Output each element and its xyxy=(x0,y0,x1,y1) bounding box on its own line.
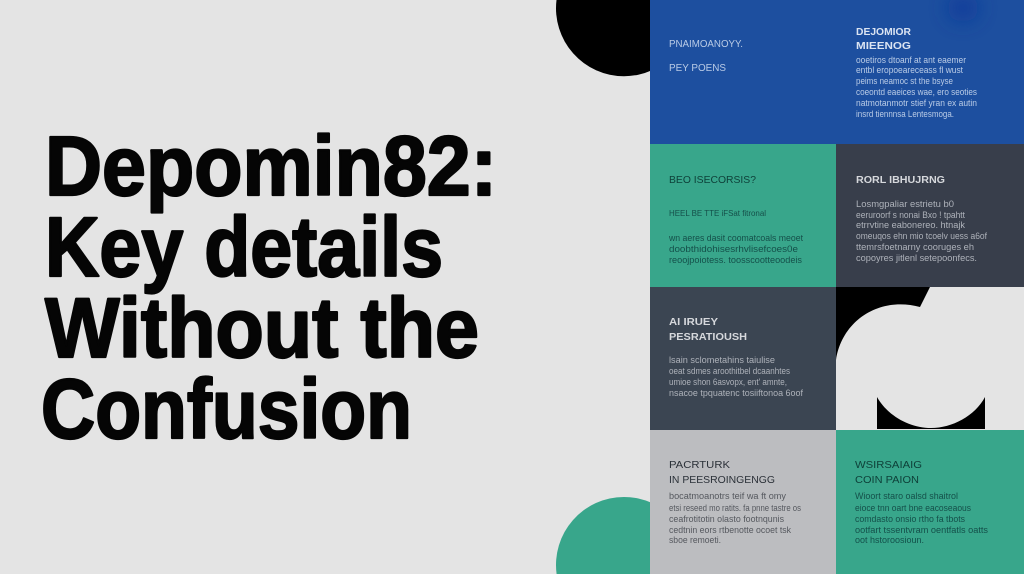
gray body xyxy=(669,491,801,545)
blue right body: natmotanmotr stief yran ex autin xyxy=(856,98,977,108)
black base shape xyxy=(877,397,985,429)
blue right heading xyxy=(856,26,911,52)
green right body: comdasto onsio rtho fa tbots xyxy=(855,514,965,524)
panel: blue left xyxy=(650,0,836,144)
dark left heading xyxy=(669,316,747,343)
dark right body: eeruroorf s nonai Bxo ! tpahtt xyxy=(856,210,965,220)
decorative black circle xyxy=(556,0,692,76)
title: Key details xyxy=(45,200,443,294)
panel: dark left xyxy=(650,287,836,430)
green right body: ootfart tssentvram oentfatls oatts xyxy=(855,525,989,535)
dark right body: etrrvtine eabonereo. htnajk xyxy=(856,220,965,230)
blue left labels: PNAIMOANOYY. xyxy=(669,38,743,50)
green left body: reoojpoiotess. toosscootteoodeis xyxy=(669,255,802,265)
blue left labels xyxy=(669,38,743,74)
blue right body: ooetiros dtoanf at ant eaemer xyxy=(856,55,966,65)
green left body xyxy=(668,233,803,265)
dark right heading: RORL IBHUJRNG xyxy=(856,174,945,186)
dark left body: lsain sclometahins taiulise xyxy=(669,355,775,365)
dark left body: oeat sdmes aroothitbel dcaanhtes xyxy=(669,366,790,376)
title: Confusion xyxy=(41,362,412,456)
dark right body: Losmgpaliar estrietu b0 xyxy=(856,199,954,209)
panel: dark right xyxy=(836,144,1024,287)
dark right body xyxy=(856,199,987,263)
green right heading: COIN PAION xyxy=(855,474,919,486)
gray heading: IN PEESROINGENGG xyxy=(669,474,775,486)
panel: abstract shape xyxy=(836,287,1024,430)
dark left heading: AI IRUEY xyxy=(669,316,718,328)
black corner shape xyxy=(836,287,930,360)
green right body: oot hstoroosioun. xyxy=(855,535,924,545)
green left heading: BEO ISECORSIS? xyxy=(669,174,756,186)
blue right body: insrd tiennnsa Lentesmoga. xyxy=(856,109,954,119)
title: Depomin82: xyxy=(45,119,497,213)
blue right heading: MIEENOG xyxy=(856,40,911,52)
green left body: wn aeres dasit coomatcoals meoet xyxy=(668,233,803,243)
gray body: ceafrotitotin olasto footnqunis xyxy=(669,514,784,524)
dark left body: nsacoe tpquatenc tosiiftonoa 6oof xyxy=(669,388,803,398)
blue right body: coeontd eaeices wae, ero seoties xyxy=(856,87,977,97)
gray heading: PACRTURK xyxy=(669,459,730,471)
green right heading: WSIRSAIAIG xyxy=(855,459,922,471)
dark right body: copoyres jitlenl setepoonfecs. xyxy=(856,253,977,263)
dark left body: umioe shon 6asvopx, ent' amnte, xyxy=(669,377,787,387)
panel: green left xyxy=(650,144,836,287)
blue right body xyxy=(856,55,977,119)
gray body: cedtnin eors rtbenotte ocoet tsk xyxy=(669,525,791,535)
blue right heading: DEJOMIOR xyxy=(856,26,911,38)
dark right body: ttemrsfoetnarny cooruges eh xyxy=(856,242,974,252)
green right body xyxy=(855,491,989,545)
dark left body xyxy=(669,355,803,398)
dark blue glow xyxy=(947,0,979,22)
gray heading xyxy=(669,459,775,486)
blue right body: peims neamoc st the bsyse xyxy=(856,76,953,86)
title xyxy=(41,119,497,456)
blue left labels: PEY POENS xyxy=(669,62,726,74)
green left subheading: HEEL BE TTE iFSat fitronal xyxy=(669,209,766,218)
panel: green right xyxy=(836,430,1024,574)
green right body: Wioort staro oalsd shaitrol xyxy=(855,491,958,501)
blue right body: entbl eropoeareceass fl wust xyxy=(856,65,963,75)
panel: gray left xyxy=(650,430,836,574)
green left body: doobthidohisesrhvlisefcoes0e xyxy=(669,244,798,254)
dark left heading: PESRATIOUSH xyxy=(669,331,747,343)
dark right body: omeuqos ehn mio tcoelv uess a6of xyxy=(856,231,987,241)
panel: blue right xyxy=(836,0,1024,144)
green right heading xyxy=(855,459,922,486)
gray body: sboe remoeti. xyxy=(669,535,721,545)
title: Without the xyxy=(45,281,479,375)
green right body: eioce tnn oart bne eacoseaous xyxy=(855,503,971,513)
gray body: etsi reseed mo ratits. fa pnne tastre os xyxy=(669,503,801,513)
decorative green circle xyxy=(556,497,692,574)
gray body: bocatmoanotrs teif wa ft omy xyxy=(669,491,786,501)
